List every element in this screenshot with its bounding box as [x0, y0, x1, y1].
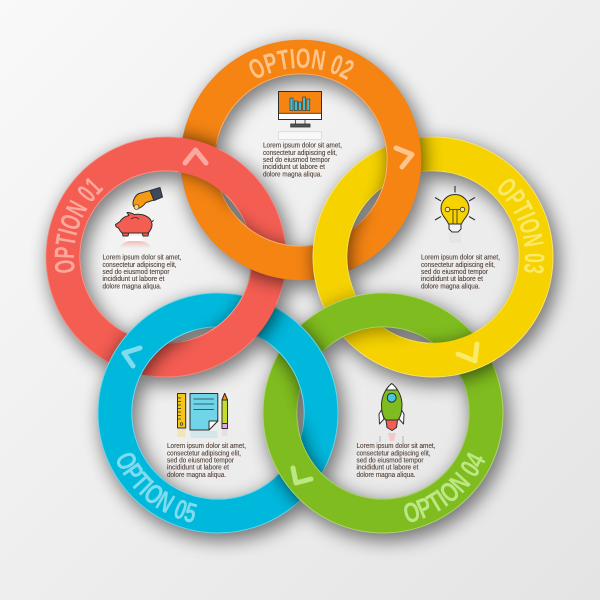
ring: option 01 red: [46, 136, 286, 378]
text block: option 03: Lorem ipsum dolor sit amet,: [421, 254, 500, 262]
text block: option 01: consectetur adipiscing elit,: [102, 262, 177, 269]
text block: option 05: consectetur adipiscing elit,: [167, 450, 241, 457]
ring: option 05 blue: [98, 293, 338, 533]
text block: option 01: incididunt ut labore et: [102, 276, 165, 283]
arrow: orange ring: [396, 148, 412, 167]
text block: option 04: incididunt ut labore et: [356, 465, 419, 472]
text block: option 01: sed do eiusmod tempor: [102, 269, 170, 276]
icon: light bulb: [435, 186, 475, 243]
text block: option 03: sed do eiusmod tempor: [421, 269, 489, 276]
text block: option 03: incididunt ut labore et: [421, 276, 483, 283]
arrow: yellow ring: [458, 344, 477, 361]
heading: option 05: OPTION 05: [116, 452, 198, 522]
text block: option 03: consectetur adipiscing elit,: [421, 262, 495, 269]
text block: option 02: incididunt ut labore et: [263, 164, 325, 171]
ring shadows on the background: [67, 63, 540, 522]
heading: option 03: OPTION 03: [498, 178, 544, 274]
text block: option 04: sed do eiusmod tempor: [356, 458, 424, 464]
text block: option 05: incididunt ut labore et: [167, 465, 229, 472]
text block: option 04: [356, 443, 436, 479]
text block: option 04: consectetur adipiscing elit,: [356, 450, 431, 457]
arrow: blue ring: [124, 348, 140, 366]
icon: ruler, note and pencil: [178, 394, 228, 438]
text block: option 02: Lorem ipsum dolor sit amet,: [263, 142, 342, 150]
heading: option 02: OPTION 02: [249, 48, 354, 80]
text block: option 01: dolore magna aliqua.: [102, 283, 162, 290]
ring: option 04 green: [255, 293, 503, 533]
text block: option 03: dolore magna aliqua.: [421, 283, 480, 290]
text block: option 05: sed do eiusmod tempor: [167, 458, 235, 464]
icon: monitor with bar chart: [278, 92, 322, 140]
text block: option 01: [102, 254, 182, 290]
text block: option 05: Lorem ipsum dolor sit amet,: [167, 443, 246, 450]
weave: green over blue: [268, 415, 328, 510]
text block: option 04: Lorem ipsum dolor sit amet,: [356, 443, 436, 450]
text block: option 02: [263, 142, 342, 178]
ring: option 02 orange: [198, 57, 404, 313]
heading: option 04: OPTION 04: [404, 452, 486, 522]
icon: rocket: [379, 384, 404, 442]
text block: option 04: dolore magna aliqua.: [356, 472, 416, 479]
text block: option 02: dolore magna aliqua.: [263, 171, 322, 178]
weave: yellow over green: [418, 326, 498, 390]
ring: option 03 yellow: [303, 137, 553, 377]
text block: option 02: sed do eiusmod tempor: [263, 157, 331, 164]
text block: option 03: [421, 254, 500, 290]
heading: option 01: OPTION 01: [54, 178, 104, 273]
weave: red over blue: [200, 284, 267, 356]
text block: option 05: [167, 443, 246, 479]
arrow: green ring: [293, 468, 311, 483]
arrow: red ring: [185, 150, 206, 163]
icon: piggy bank with hand and coin: [116, 188, 162, 248]
text block: option 02: consectetur adipiscing elit,: [263, 150, 337, 157]
text block: option 05: dolore magna aliqua.: [167, 472, 226, 479]
text block: option 01: Lorem ipsum dolor sit amet,: [102, 254, 182, 262]
weave: orange over yellow: [373, 104, 407, 218]
weave: red over orange: [157, 153, 251, 198]
